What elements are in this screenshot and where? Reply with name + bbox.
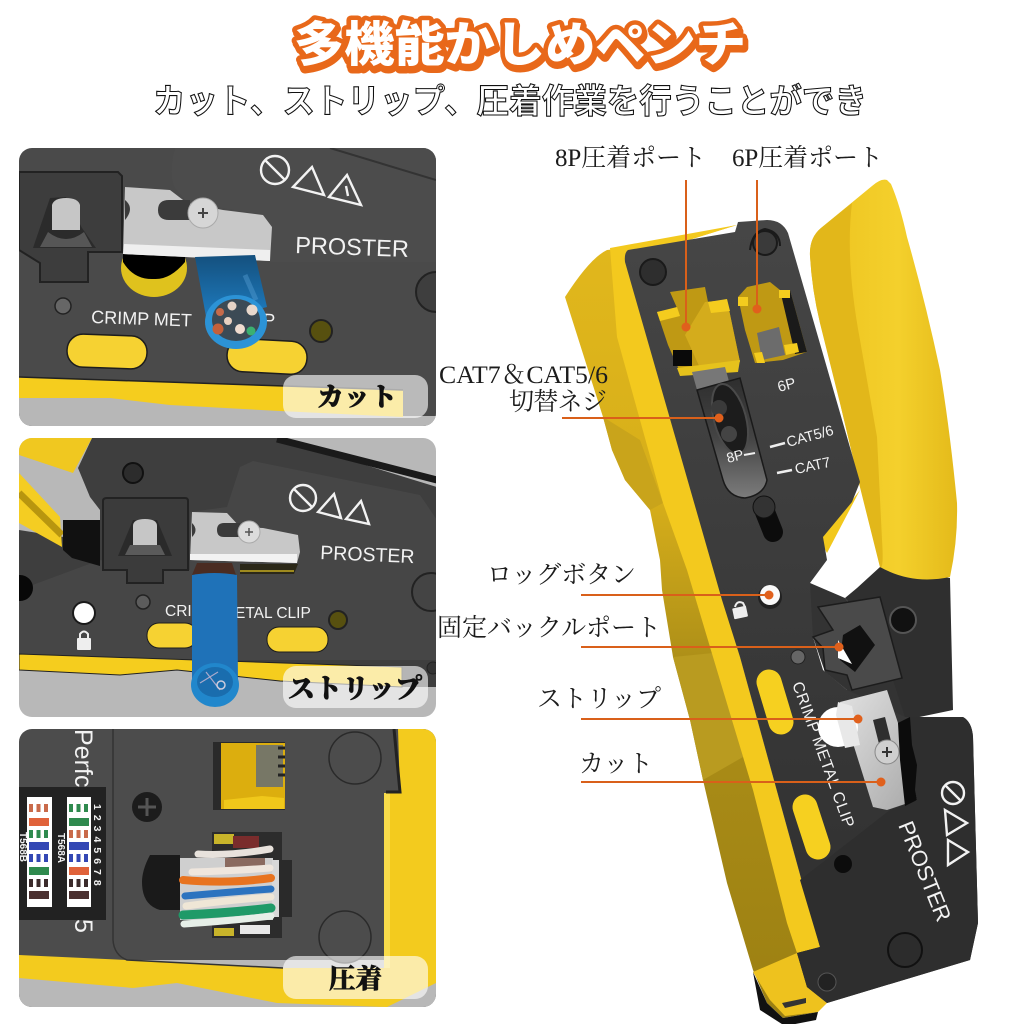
plate labels: [770, 375, 835, 478]
panel: strip: [7, 438, 450, 717]
crimping tool illustration: [565, 180, 978, 1024]
tag: strip: [283, 666, 428, 708]
crimp text: CRIMP METAL CLIP: [788, 680, 857, 830]
6P port: [738, 282, 807, 363]
wiring label: T568B: [17, 832, 28, 862]
labels: 8P圧着ポート: [555, 144, 706, 172]
latch: [697, 378, 767, 498]
yellow frame: [19, 729, 436, 1007]
lower port with wires: [142, 832, 292, 938]
jaw block: [19, 172, 122, 282]
labels: 固定バックルポート: [437, 614, 661, 642]
crimp text: CRI: [165, 603, 192, 620]
labels: [437, 144, 883, 778]
plate labels: CAT5/6: [785, 423, 835, 451]
warning icons: [261, 156, 361, 205]
wiring label: 12345678: [91, 804, 103, 891]
blade: [123, 187, 272, 261]
tag: cut: [283, 375, 428, 418]
jaw block: [103, 498, 188, 583]
PROSTER text: PROSTER: [295, 232, 409, 262]
labels: CAT7＆CAT5/6: [439, 362, 608, 389]
labels: ロッグボタン: [487, 562, 636, 589]
adjust slot: [753, 496, 775, 532]
plate labels: 6P: [776, 375, 798, 396]
bolts: [640, 229, 922, 991]
crimp text: P: [263, 310, 276, 330]
crimp text: CRIMP MET: [91, 307, 192, 331]
blade: [190, 512, 300, 574]
labels: 切替ネジ: [509, 388, 607, 416]
crimp text: [166, 605, 310, 618]
rotated text: [75, 731, 93, 932]
subtitle: カット、ストリップ、圧着作業を行うことができ: [153, 82, 867, 121]
panel: cut: [19, 148, 456, 426]
upper port: [213, 742, 285, 810]
crimp text: [92, 310, 274, 326]
bottom gray and yellow band: [19, 377, 436, 426]
panel: crimp: [17, 729, 436, 1007]
rotated text: Perfc: [69, 729, 97, 787]
labels: ストリップ: [537, 686, 661, 713]
yellow body: [565, 225, 860, 1018]
bottom end: [753, 972, 818, 1024]
plate labels: CAT7: [794, 455, 832, 478]
cover plate: [797, 717, 978, 1003]
title: 多機能かしめペンチ: [294, 19, 746, 72]
crimp text: ETAL CLIP: [235, 605, 311, 622]
screw: [132, 792, 162, 822]
jaw block: [813, 597, 902, 690]
yellow handle: [19, 438, 100, 566]
yellow grips: [66, 334, 148, 369]
bottom yellow band: [19, 654, 402, 687]
rotated text: 5: [69, 919, 97, 933]
tool body: [19, 438, 437, 687]
labels: カット: [579, 751, 653, 778]
screws: [7, 463, 450, 674]
blue cable: [195, 255, 267, 349]
leader lines: [562, 180, 886, 786]
tag: strip: ストリップ: [288, 674, 422, 704]
yellow crimp hole: [121, 250, 187, 297]
handle: [810, 180, 957, 720]
blade: [818, 690, 917, 810]
tag: crimp: 圧着: [329, 964, 382, 994]
8P port: [657, 287, 740, 390]
small screws: [55, 272, 456, 342]
large bolts: [319, 732, 381, 963]
labels: 6P圧着ポート: [732, 144, 883, 172]
yellow grip right: [226, 338, 308, 375]
lock button: [732, 585, 782, 619]
PROSTER text: PROSTER: [893, 818, 956, 925]
yellow grips: [769, 682, 818, 847]
tag: cut: カット: [317, 383, 397, 412]
blue cable: [191, 563, 239, 707]
tag: crimp: [283, 956, 428, 999]
PROSTER text: PROSTER: [320, 542, 415, 568]
wiring label: [17, 787, 106, 920]
lock button: [72, 601, 96, 650]
latch: 8P: [725, 446, 745, 466]
facet highlights: [673, 653, 743, 780]
main plate: [625, 220, 978, 1003]
warning icons: [942, 782, 968, 865]
wiring label: T568A: [55, 833, 66, 863]
warning icons: [290, 485, 369, 524]
yellow grips: [147, 623, 328, 652]
